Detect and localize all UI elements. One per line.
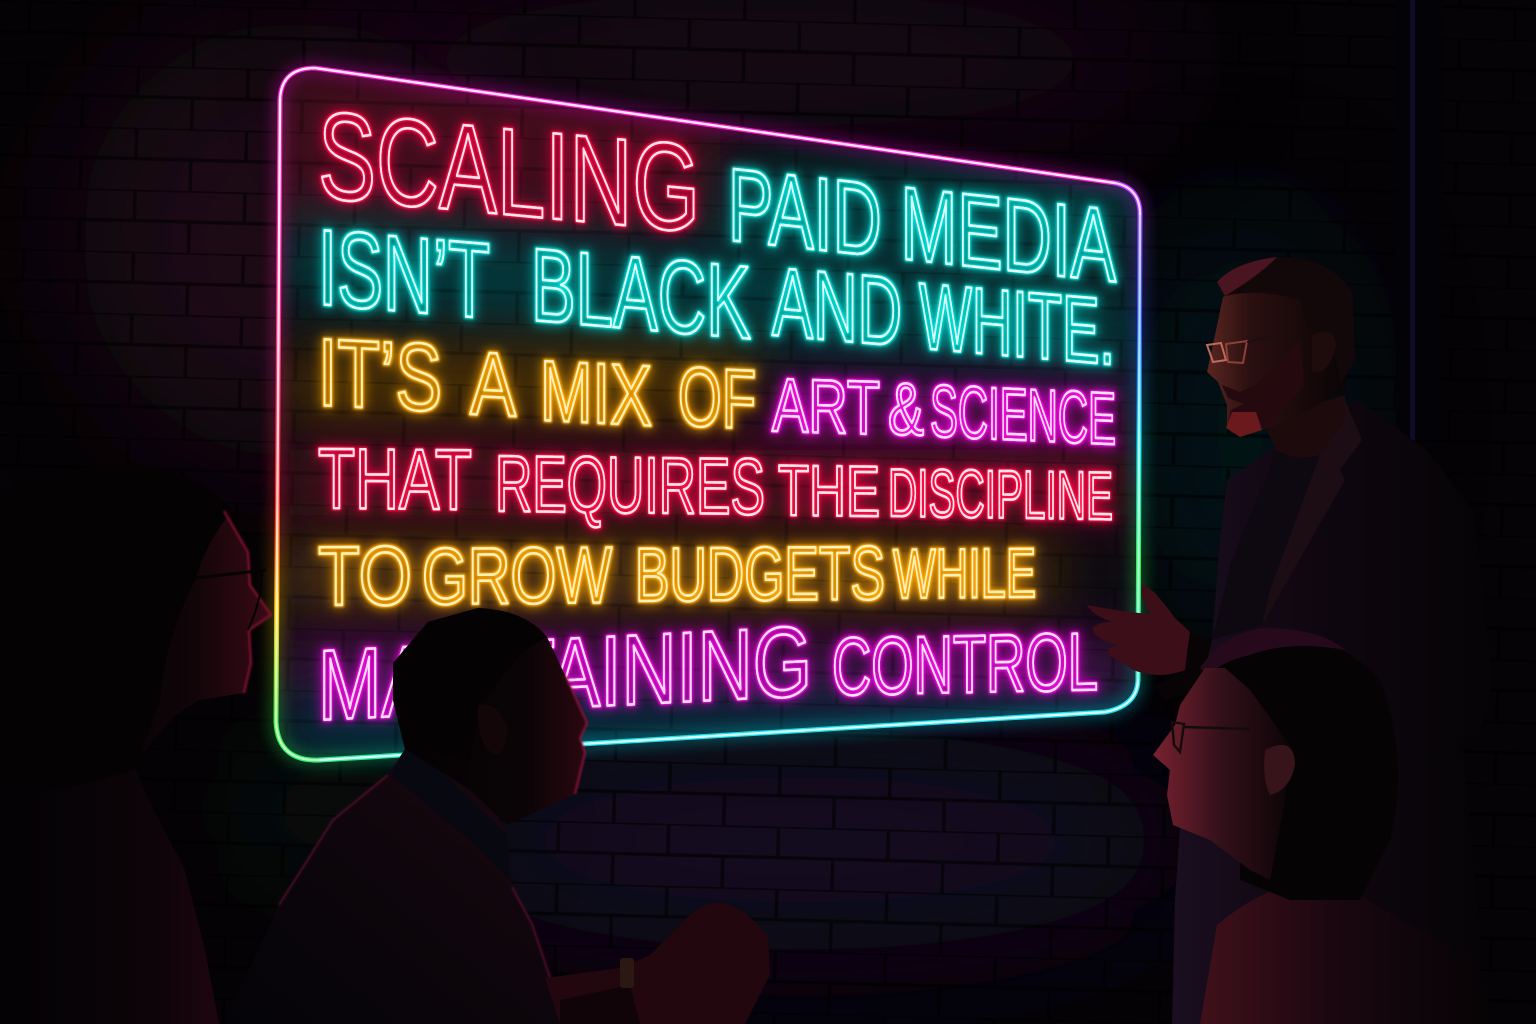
- person: standing presenter: [1087, 257, 1493, 1024]
- line 2: ISN'T BLACK AND WHITE.: ISN’T: [318, 206, 490, 342]
- line 4: THAT REQUIRES THE DISCIPLINE: DISCIPLINE: [888, 455, 1113, 534]
- line 3: ART & SCIENCE: &: [888, 367, 924, 451]
- line 4: THAT REQUIRES THE DISCIPLINE: [318, 431, 1113, 534]
- glasses: [1207, 333, 1292, 363]
- pointing hand: [1087, 584, 1190, 675]
- glasses: [195, 570, 266, 630]
- hair: [1217, 257, 1355, 385]
- line 2: ISN'T BLACK AND WHITE.: WHITE.: [919, 263, 1115, 385]
- line 3: IT'S A MIX OF: A: [470, 333, 516, 436]
- line 3: ART & SCIENCE: SCIENCE: [930, 369, 1116, 460]
- line 5: TO GROW BUDGETS WHILE: WHILE: [893, 534, 1036, 613]
- line 6: MAINTAINING CONTROL: MAINTAINING: [318, 605, 812, 742]
- line 1: SCALING: SCALING: [318, 86, 700, 259]
- forearm and clasped hands: [545, 902, 770, 1024]
- line 4: THAT REQUIRES THE DISCIPLINE: REQUIRES: [495, 439, 765, 531]
- line 3: IT'S A MIX OF: IT’S: [318, 319, 442, 432]
- ear: [478, 704, 508, 755]
- hair: [393, 608, 547, 760]
- shirt: [1200, 878, 1500, 1024]
- face and neck: [100, 511, 271, 764]
- body: [224, 749, 560, 1024]
- face and neck: [1153, 668, 1290, 880]
- lapel: [1262, 400, 1362, 625]
- line 2: ISN'T BLACK AND WHITE.: [318, 206, 1115, 385]
- line 3: IT'S A MIX OF: OF: [678, 349, 756, 447]
- line 3: IT'S A MIX OF: [318, 319, 756, 447]
- hair: [0, 462, 232, 790]
- line 5: TO GROW BUDGETS WHILE: GROW: [422, 530, 612, 621]
- ear: [1312, 332, 1336, 372]
- neon sign headline: [318, 86, 1116, 742]
- ear: [1264, 745, 1295, 795]
- curly hair: [1200, 628, 1398, 900]
- person: woman, left: [0, 462, 271, 1024]
- line 3: ART & SCIENCE: ART: [772, 363, 880, 451]
- glasses: [1172, 722, 1250, 752]
- shoulder rim light: [279, 775, 557, 998]
- line 2: ISN'T BLACK AND WHITE.: AND: [772, 246, 902, 367]
- profile rim light: [565, 675, 587, 794]
- line 1: PAID MEDIA: PAID MEDIA: [728, 147, 1116, 305]
- line 5: TO GROW BUDGETS WHILE: TO: [318, 529, 412, 623]
- body: [0, 764, 219, 1024]
- line 4: THAT REQUIRES THE DISCIPLINE: THAT: [318, 431, 472, 529]
- line 2: ISN'T BLACK AND WHITE.: BLACK: [531, 227, 751, 362]
- lit hair front: [1217, 257, 1277, 296]
- person: seated woman, right: [1153, 628, 1500, 1024]
- collar: [392, 749, 510, 880]
- beard: [1222, 340, 1304, 437]
- line 3: ART & SCIENCE: [772, 363, 1116, 460]
- neck: [1262, 395, 1345, 458]
- line 5: TO GROW BUDGETS WHILE: BUDGETS: [635, 531, 885, 618]
- lit hair crown: [1200, 628, 1345, 675]
- head: [393, 608, 587, 825]
- neon sign panel: [270, 60, 1150, 770]
- lit beard edge: [1226, 412, 1262, 437]
- neon sign border: [276, 68, 1140, 760]
- jacket: [1172, 400, 1493, 1024]
- t-shirt: [1212, 450, 1320, 640]
- head: [1207, 285, 1350, 437]
- wristwatch: [620, 958, 634, 988]
- line 4: THAT REQUIRES THE DISCIPLINE: THE: [778, 451, 880, 532]
- profile rim light: [224, 511, 271, 693]
- sleeve: [1155, 632, 1212, 700]
- line 5: TO GROW BUDGETS WHILE: [318, 529, 1036, 623]
- pipe on the wall: [1396, 0, 1442, 440]
- person: seated man, centre: [224, 608, 770, 1024]
- line 6: MAINTAINING CONTROL: CONTROL: [832, 617, 1098, 713]
- line 3: IT'S A MIX OF: MIX: [540, 343, 652, 445]
